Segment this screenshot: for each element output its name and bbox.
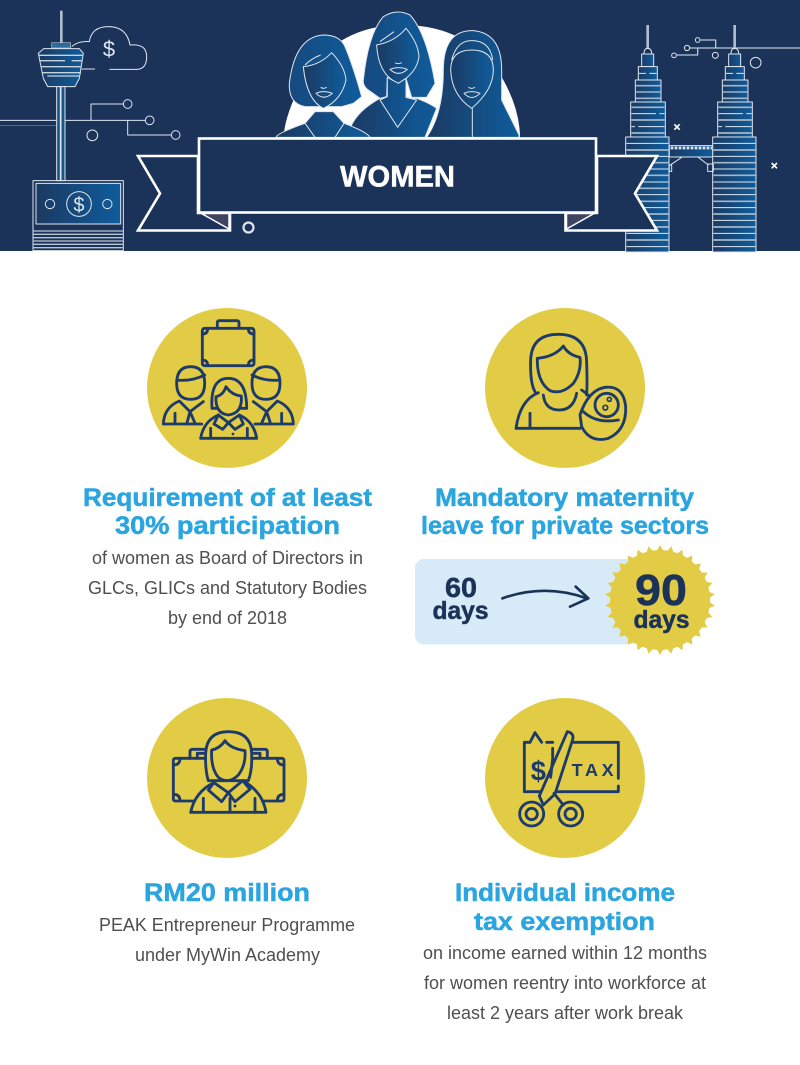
- illustration: tower, cloud, circuit and money: [0, 11, 180, 251]
- icon: scissors cutting tax: [485, 698, 645, 858]
- panel: board participation: [83, 308, 373, 628]
- heading: [421, 484, 709, 540]
- body text: [423, 943, 707, 1023]
- heading: Individual income: [455, 879, 675, 907]
- icon: mother and baby: [485, 308, 645, 468]
- icon: board of directors: [147, 308, 307, 468]
- body text: for women reentry into workforce at: [424, 973, 706, 993]
- heading: leave for private sectors: [421, 512, 709, 540]
- banner title: WOMEN: [340, 160, 455, 194]
- ribbon banner: [138, 138, 657, 230]
- panel: maternity leave: [415, 308, 733, 662]
- text: 60 days: 60: [445, 572, 477, 603]
- heading: [455, 879, 675, 936]
- text: 60 days: days: [432, 597, 488, 625]
- icon: entrepreneur with briefcases: [147, 698, 307, 858]
- illustration: tower, cloud, circuit and money: $: [73, 194, 85, 216]
- heading: Mandatory maternity: [435, 484, 694, 512]
- heading: [83, 484, 373, 540]
- icon: scissors cutting tax: $: [531, 756, 546, 787]
- arrow: [502, 587, 588, 607]
- badge: 90 days: 90: [635, 566, 687, 615]
- body text: under MyWin Academy: [135, 945, 320, 965]
- callout: 60 days to 90 days: [415, 528, 733, 662]
- body text: PEAK Entrepreneur Programme: [99, 915, 355, 935]
- heading: 30% participation: [115, 512, 340, 540]
- illustration: twin towers and circuit: [626, 25, 800, 252]
- illustration: three women: [276, 12, 520, 138]
- heading: Requirement of at least: [83, 484, 373, 512]
- body text: of women as Board of Directors in: [92, 548, 363, 568]
- text: 60 days: [432, 572, 488, 625]
- body text: least 2 years after work break: [447, 1003, 684, 1023]
- panel: RM20 million: [99, 698, 355, 965]
- body text: by end of 2018: [168, 608, 287, 628]
- body text: [88, 548, 367, 628]
- body text: [99, 915, 355, 965]
- heading: RM20 million: [144, 879, 310, 907]
- panel: tax exemption: [423, 698, 707, 1023]
- icon: scissors cutting tax: TAX: [572, 760, 614, 780]
- body text: on income earned within 12 months: [423, 943, 707, 963]
- illustration: tower, cloud, circuit and money: $: [103, 37, 115, 62]
- header band: [0, 0, 800, 252]
- badge: 90 days: [605, 528, 733, 662]
- body text: GLCs, GLICs and Statutory Bodies: [88, 578, 367, 598]
- heading: tax exemption: [474, 908, 655, 936]
- badge: 90 days: days: [634, 606, 690, 634]
